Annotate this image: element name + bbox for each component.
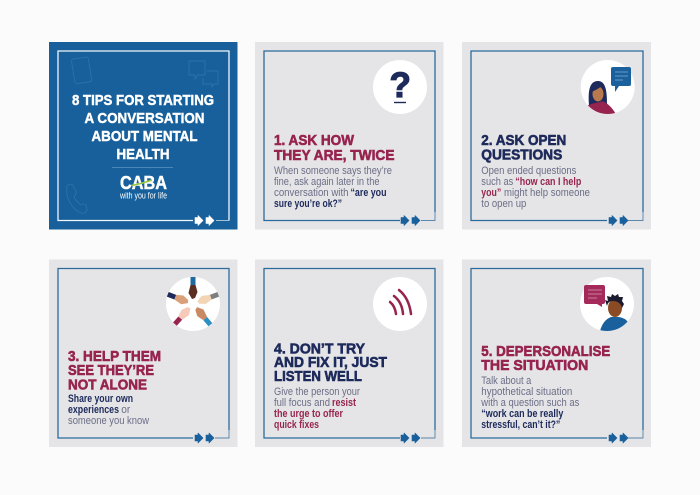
heading: tip 4: LISTEN WELL <box>274 369 362 385</box>
heading: tip 2 <box>481 133 566 164</box>
text: tip 1 body: When someone says they’re <box>274 165 392 177</box>
icon: double arrow <box>195 216 214 226</box>
heading: title: A CONVERSATION <box>84 111 204 127</box>
text: tip 2 body: Open ended questions <box>481 165 577 177</box>
text: tip 2 body: “how can I help <box>515 176 582 188</box>
text: tip 5 body: with a question such as <box>480 397 580 409</box>
heading: tip 3: 3. HELP THEM <box>68 349 161 365</box>
text: tip 5 body <box>480 375 580 431</box>
heading: tip 4 <box>274 341 387 385</box>
logo: CABA: CABA <box>120 172 167 193</box>
text: tip 1 body: conversation with <box>274 187 348 199</box>
icon: sound waves <box>373 277 427 331</box>
logo: CABA: with you for life <box>119 190 167 200</box>
heading: title <box>72 93 214 163</box>
text: tip 1 body: fine, ask again later in the <box>274 176 380 188</box>
text: tip 1 body: “are you <box>350 187 386 199</box>
text: tip 2 body: might help someone <box>504 187 590 199</box>
heading: tip 3: SEE THEY’RE <box>68 363 154 379</box>
text: tip 3 body: or <box>121 404 131 416</box>
icon: double arrow <box>609 433 628 443</box>
heading: tip 5: 5. DEPERSONALISE <box>481 344 611 360</box>
text: tip 5 body: stressful, can’t it?” <box>481 419 560 431</box>
icon: man with speech bubble <box>580 277 634 332</box>
heading: title: 8 TIPS FOR STARTING <box>72 93 214 109</box>
logo: CABA <box>119 172 167 200</box>
heading: tip 5: THE SITUATION <box>481 358 588 374</box>
heading: tip 4: 4. DON’T TRY <box>274 341 365 357</box>
heading: tip 3 <box>68 349 161 393</box>
text: tip 4 body: the urge to offer <box>274 408 344 420</box>
icon: five hands <box>166 277 220 331</box>
text: tip 4 body <box>274 386 360 431</box>
text: tip 5 body: “work can be really <box>481 408 564 420</box>
text: tip 1 body <box>274 165 392 210</box>
text: tip 1 body: sure you’re ok?” <box>274 198 342 210</box>
text: tip 2 body <box>481 165 590 210</box>
panel: tip 2 <box>462 42 651 230</box>
text: tip 5 body: hypothetical situation <box>481 386 572 398</box>
heading: title: ABOUT MENTAL <box>92 129 198 145</box>
heading: tip 4: AND FIX IT, JUST <box>274 355 387 371</box>
icon: faint tablet <box>71 57 92 84</box>
panel: tip 4 <box>255 260 444 447</box>
text: tip 3 body: Share your own <box>68 393 133 405</box>
text: tip 4 body: resist <box>332 397 356 409</box>
heading: tip 5 <box>481 344 611 374</box>
infographic <box>49 42 651 447</box>
panel: tip 3 <box>49 260 238 447</box>
icon: double arrow <box>195 433 214 443</box>
heading: tip 1: 1. ASK HOW <box>274 133 354 149</box>
text: tip 3 body: someone you know <box>68 415 149 427</box>
panel: title card <box>49 42 238 230</box>
heading: tip 2: 2. ASK OPEN <box>481 133 566 149</box>
text: tip 4 body: Give the person your <box>274 386 360 398</box>
heading: tip 3: NOT ALONE <box>68 377 147 393</box>
icon: faint telephone <box>67 184 87 213</box>
text: tip 3 body <box>68 393 149 427</box>
icon: woman with speech bubble <box>581 60 635 118</box>
icon: double arrow <box>609 216 628 226</box>
icon: question mark: ? <box>390 66 411 105</box>
text: tip 2 body: you” <box>481 187 501 199</box>
heading: title: HEALTH <box>116 147 170 163</box>
heading: tip 1: THEY ARE, TWICE <box>274 148 395 164</box>
icon: double arrow <box>401 433 420 443</box>
text: tip 5 body: Talk about a <box>481 375 532 387</box>
text: tip 4 body: quick fixes <box>274 419 319 431</box>
text: tip 2 body: to open up <box>481 198 526 210</box>
icon: faint speech bubbles <box>189 61 218 87</box>
text: tip 2 body: such as <box>481 176 514 188</box>
icon: double arrow <box>401 216 420 226</box>
heading: tip 2: QUESTIONS <box>481 148 563 164</box>
panel: tip 1 <box>255 42 444 230</box>
text: tip 3 body: experiences <box>68 404 119 416</box>
panel: tip 5 <box>462 260 651 447</box>
icon: question mark <box>373 60 427 114</box>
text: tip 4 body: full focus and <box>274 397 330 409</box>
heading: tip 1 <box>274 133 395 164</box>
